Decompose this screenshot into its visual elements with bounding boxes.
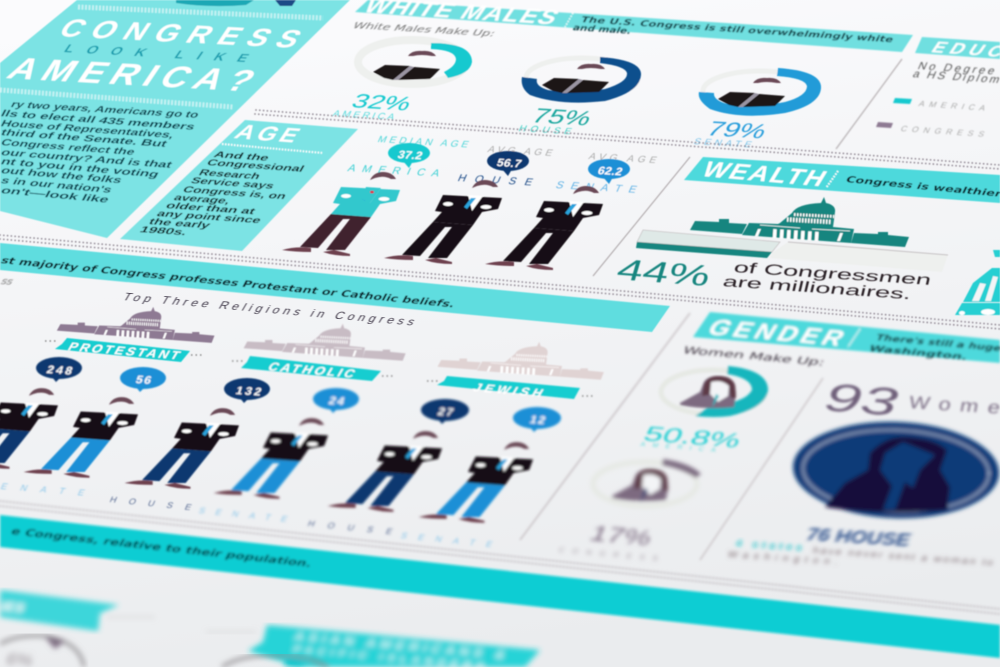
panel: education: a HS Diplom	[911, 69, 1000, 86]
religion figure: Catholic Senate 24	[197, 388, 359, 524]
dotted divider upper	[0, 110, 1000, 329]
ring: America 32%: 32%	[348, 91, 416, 115]
panel: white males header	[355, 0, 913, 52]
religion figure: Jewish Senate 12	[399, 407, 561, 549]
religion subtitle: Top Three Religions in Congress	[120, 291, 418, 328]
religion figure: Catholic House 132: 132	[234, 385, 264, 398]
76 House label: 76 HOUSE	[803, 525, 913, 551]
age paragraph: older than at	[163, 201, 258, 217]
panel: age	[120, 120, 358, 251]
millionaire bar	[636, 230, 948, 272]
intro paragraph: out how the folks	[0, 166, 124, 186]
ring: women America 50.8%: AMERICA	[639, 441, 717, 454]
age figure: Senate	[485, 152, 659, 270]
panel: age: AGE	[230, 121, 305, 147]
panel: white males header: and male.	[571, 23, 633, 36]
ring: women Congress 17%: 17%	[586, 521, 656, 550]
capitol: Protestant: PROTESTANT	[65, 340, 183, 362]
age figure: America	[282, 135, 471, 256]
ring: America 32%	[331, 40, 472, 122]
intro paragraph: nt to you in the voting	[0, 157, 161, 180]
panel: wealth: 44%	[613, 253, 715, 292]
icon: right edge transport	[955, 250, 1000, 315]
gender note: 4 states	[734, 539, 804, 553]
panel: gender: There's still a huge	[874, 333, 1000, 354]
religion figure: Jewish House 27: HOUSE	[306, 519, 394, 536]
age figure: Senate: AVG AGE	[587, 152, 659, 166]
wealth statement: of Congressmen	[732, 260, 933, 288]
intro paragraph: third of the Senate. But	[0, 128, 169, 150]
ring: women America 50.8%: 50.8%	[640, 422, 745, 452]
religion figure: Protestant Senate 56	[0, 367, 166, 497]
age paragraph: Congress is, on	[180, 185, 288, 202]
wealth statement	[721, 260, 933, 303]
ribbon: Asian Americans	[248, 625, 540, 667]
panel: wealth: Congress is wealthier	[844, 175, 1000, 199]
age figure: House: HOUSE	[456, 173, 535, 188]
ribbon: left group	[0, 590, 256, 632]
age figure: House: AVG AGE	[486, 145, 555, 159]
93 women stat: 93	[822, 375, 901, 424]
panel: title	[0, 0, 350, 238]
religion figure: Catholic House 132: HOUSE	[108, 495, 193, 512]
icon: navy medallion silhouette	[791, 418, 1000, 522]
wealth statement: are millionaires.	[721, 274, 913, 303]
religion figure: Catholic House 132	[108, 378, 270, 512]
ring: lower centre	[222, 655, 328, 667]
age paragraph: 1980s.	[137, 225, 189, 238]
intro paragraph: on't—look like	[0, 186, 111, 205]
title text: CONGRESS	[53, 15, 307, 54]
age paragraph: any point since	[154, 209, 264, 226]
gender note: have never sent a woman to	[811, 546, 995, 568]
ring: lower left	[0, 636, 84, 667]
capitol: Catholic	[232, 324, 406, 381]
legend: AMERICA	[917, 99, 988, 112]
intro paragraph: lls to elect all 435 members	[0, 109, 197, 133]
age figure: America: MEDIAN AGE	[376, 135, 471, 150]
legend: CONGRESS	[899, 124, 987, 139]
age paragraph	[137, 150, 306, 238]
religion figure: Jewish Senate 12: SENATE	[399, 531, 494, 549]
ribbon: Asian Americans: ASIAN AMERICANS &	[292, 630, 508, 662]
panel: wealth	[593, 157, 1000, 303]
panel: white males header: The U.S. Congress is still overwhelmingly white	[579, 15, 895, 45]
panel: gender	[520, 312, 1000, 540]
religion figure: Protestant Senate 56: ENATE	[0, 482, 86, 497]
band: religion: st majority of Congress professes Protestant or Catholic beliefs.	[0, 255, 457, 310]
gender note: Washington.	[726, 550, 840, 567]
age paragraph: Congressional	[204, 158, 306, 174]
religion figure: Protestant Senate 56: 56	[134, 374, 154, 387]
intro paragraph: Congress reflect the	[0, 138, 137, 158]
age paragraph: the early	[146, 217, 213, 231]
age figure: Senate: 62.2	[596, 165, 625, 178]
ring: America 32%: AMERICA	[331, 109, 397, 122]
panel: education	[836, 37, 1000, 149]
intro paragraph: House of Representatives,	[0, 119, 176, 141]
ring: Senate 79%: SENATE	[692, 137, 754, 150]
ring: women America 50.8%	[639, 366, 768, 454]
panel: gender: GENDER	[703, 316, 849, 351]
band: representation	[0, 515, 1000, 658]
ring: Senate 79%	[692, 68, 821, 150]
age paragraph: And the	[211, 150, 272, 163]
age figure: House: 56.7	[495, 157, 523, 170]
age paragraph: Research	[196, 168, 262, 182]
capitol: Jewish	[427, 342, 604, 400]
age figure: America: AMERICA	[346, 163, 442, 179]
age paragraph: average,	[171, 193, 232, 206]
93 women stat	[700, 375, 1000, 560]
dotted divider lower	[0, 501, 1000, 614]
intro paragraph: our country? And is that	[0, 148, 174, 171]
ring: House 75%: HOUSE	[517, 124, 574, 137]
intro paragraph: s in our nation's	[0, 176, 114, 196]
ring: Senate 79%: 79%	[703, 117, 772, 143]
capitol icon	[690, 197, 909, 247]
capitol: Protestant	[45, 307, 214, 362]
gender note	[726, 539, 995, 568]
title text	[1, 15, 307, 98]
religion figure: Protestant House 248	[0, 357, 82, 469]
age paragraph: Service says	[188, 176, 277, 191]
age figure: House	[384, 145, 555, 264]
intro paragraph: ry two years, Americans go to	[9, 100, 201, 120]
ring: women Congress 17%: CONGRESS	[557, 546, 659, 563]
white males subtitle: White Males Make Up:	[350, 21, 497, 39]
ring: House 75%	[517, 57, 641, 137]
religion figure: Jewish House 27	[306, 399, 469, 536]
band: representation: e Congress, relative to their population.	[9, 525, 315, 570]
intro paragraph	[0, 100, 201, 205]
legend	[876, 98, 988, 139]
ring: House 75%: 75%	[528, 104, 597, 130]
title text: AMERICA?	[1, 52, 263, 98]
religion figure: Catholic Senate 24: 24	[327, 395, 347, 408]
93 women stat: Wome	[907, 393, 1000, 418]
religion figure: Jewish House 27: 27	[436, 406, 455, 419]
religion figure: Jewish Senate 12: 12	[528, 414, 548, 427]
age figure: Senate: SENATE	[554, 180, 639, 196]
age figure: America: 37.2	[396, 149, 425, 162]
title text: LOOK LIKE	[61, 42, 252, 64]
panel: gender: Washington.	[867, 344, 969, 362]
panel: gender: Women Make Up:	[681, 344, 827, 368]
capitol: Catholic: CATHOLIC	[265, 360, 358, 380]
ring: women Congress 17%	[557, 459, 701, 563]
band: religion	[0, 243, 670, 332]
capitol: Jewish: JEWISH	[470, 381, 546, 400]
panel: education: No Degree	[916, 61, 997, 77]
religion figure: Protestant House 248: 248	[45, 364, 75, 377]
religion figure: Catholic Senate 24: SENATE	[197, 506, 289, 524]
panel: wealth: WEALTH	[697, 158, 831, 191]
